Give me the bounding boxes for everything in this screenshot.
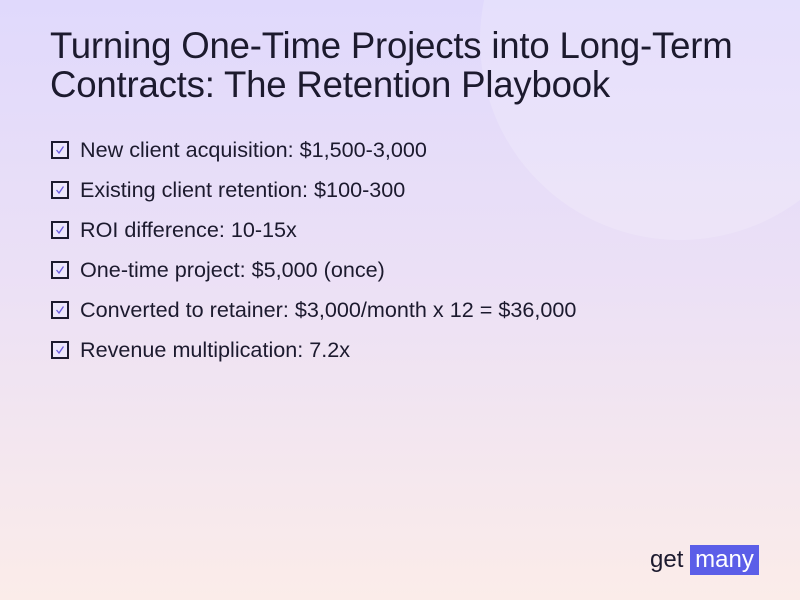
list item 4	[51, 257, 385, 282]
list item 3	[51, 217, 297, 242]
text: New client acquisition: $1,500-3,000	[80, 137, 427, 162]
list item 2	[51, 177, 405, 202]
text: Converted to retainer: $3,000/month x 12 = $36,000	[80, 297, 576, 322]
list item 6	[51, 337, 350, 362]
logo: get	[650, 546, 683, 573]
text: One-time project: $5,000 (once)	[80, 257, 385, 282]
list item 5	[51, 297, 576, 322]
title: Turning One-Time Projects into Long-Term Contracts: The Retention Playbook	[50, 25, 732, 105]
text: Revenue multiplication: 7.2x	[80, 337, 350, 362]
logo	[650, 545, 759, 575]
text: Existing client retention: $100-300	[80, 177, 405, 202]
list item 1	[51, 137, 427, 162]
text: ROI difference: 10-15x	[80, 217, 297, 242]
text: many	[695, 546, 754, 573]
